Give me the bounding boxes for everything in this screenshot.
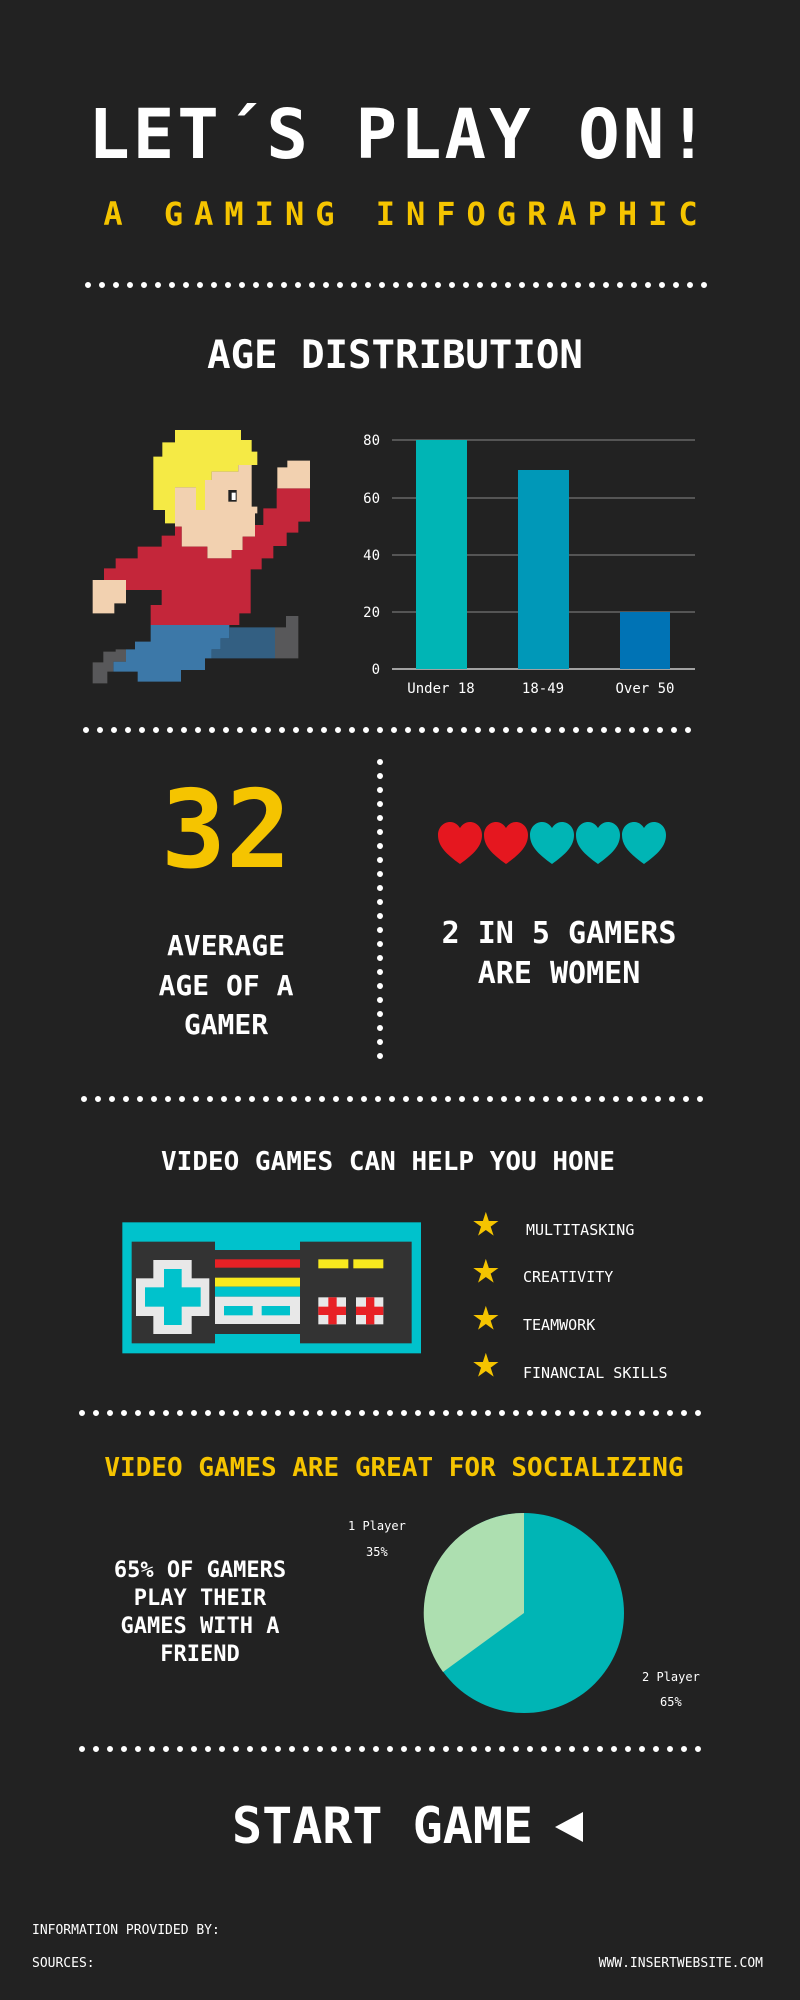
bar chart: age distribution (363, 433, 695, 697)
pie chart: players: 1 Player (348, 1519, 406, 1533)
icon: game controller (122, 1222, 421, 1354)
item: multitasking: ★ (472, 1193, 500, 1247)
text: 2 in 5 gamers are women (442, 916, 676, 990)
text: 2 in 5 gamers are women: 2 IN 5 GAMERS (442, 916, 676, 951)
text: 65% of gamers (114, 1558, 286, 1667)
text: average age of a gamer: GAMER (184, 1008, 268, 1041)
pie chart: players: 2 Player (642, 1670, 700, 1684)
text: average age of a gamer: AGE OF A (159, 968, 293, 1002)
item: multitasking (472, 1193, 634, 1247)
bar chart: age distribution: 20 (363, 605, 380, 621)
call to action: start game: START GAME (232, 1797, 533, 1855)
footer: sources: SOURCES: (32, 1956, 95, 1971)
list: skills (472, 1193, 668, 1388)
bar chart: age distribution: 18-49 (522, 681, 564, 697)
item: multitasking: MULTITASKING (526, 1221, 634, 1239)
item: financial skills: FINANCIAL SKILLS (523, 1364, 668, 1382)
item: creativity: ★ (472, 1240, 500, 1294)
bar chart: age distribution: Under 18 (407, 681, 475, 697)
bar chart: age distribution: 80 (363, 433, 380, 449)
text: 2 in 5 gamers are women: ARE WOMEN (478, 956, 640, 990)
pie chart: players: 35% (366, 1545, 388, 1559)
icon: pixel gamer character (92, 430, 310, 684)
icon: hearts (438, 822, 666, 864)
bar chart: age distribution: 40 (363, 548, 380, 564)
heading: age distribution: AGE DISTRIBUTION (207, 333, 583, 378)
heading: video games can help you hone: VIDEO GAMES CAN HELP YOU HONE (161, 1147, 615, 1177)
item: teamwork (472, 1287, 596, 1341)
heading: socializing: VIDEO GAMES ARE GREAT FOR SOCIALIZING (104, 1453, 684, 1483)
item: financial skills (472, 1334, 668, 1388)
title: LET´S PLAY ON! (88, 95, 712, 175)
bar chart: age distribution: 0 (372, 662, 380, 678)
item: financial skills: ★ (472, 1334, 500, 1388)
item: teamwork: ★ (472, 1287, 500, 1341)
text: 65% of gamers: PLAY THEIR (134, 1586, 266, 1611)
bar chart: age distribution: Over 50 (615, 681, 675, 697)
text: 65% of gamers: GAMES WITH A (121, 1614, 279, 1639)
text: average age of a gamer: AVERAGE (167, 929, 285, 962)
footer: website: WWW.INSERTWEBSITE.COM (599, 1956, 763, 1971)
item: teamwork: TEAMWORK (523, 1316, 595, 1334)
item: creativity (472, 1240, 613, 1294)
footer: info: INFORMATION PROVIDED BY: (32, 1923, 220, 1938)
big number: 32: 32 (161, 768, 291, 893)
icon: play triangle (555, 1812, 583, 1842)
pie chart: players: 65% (660, 1695, 682, 1709)
subtitle: A GAMING INFOGRAPHIC (103, 195, 709, 233)
pie chart: players (348, 1513, 700, 1713)
text: average age of a gamer (159, 929, 293, 1041)
text: 65% of gamers: FRIEND (160, 1642, 240, 1667)
bar chart: age distribution: 60 (363, 491, 380, 507)
text: 65% of gamers: 65% OF GAMERS (114, 1558, 286, 1583)
item: creativity: CREATIVITY (523, 1268, 613, 1286)
